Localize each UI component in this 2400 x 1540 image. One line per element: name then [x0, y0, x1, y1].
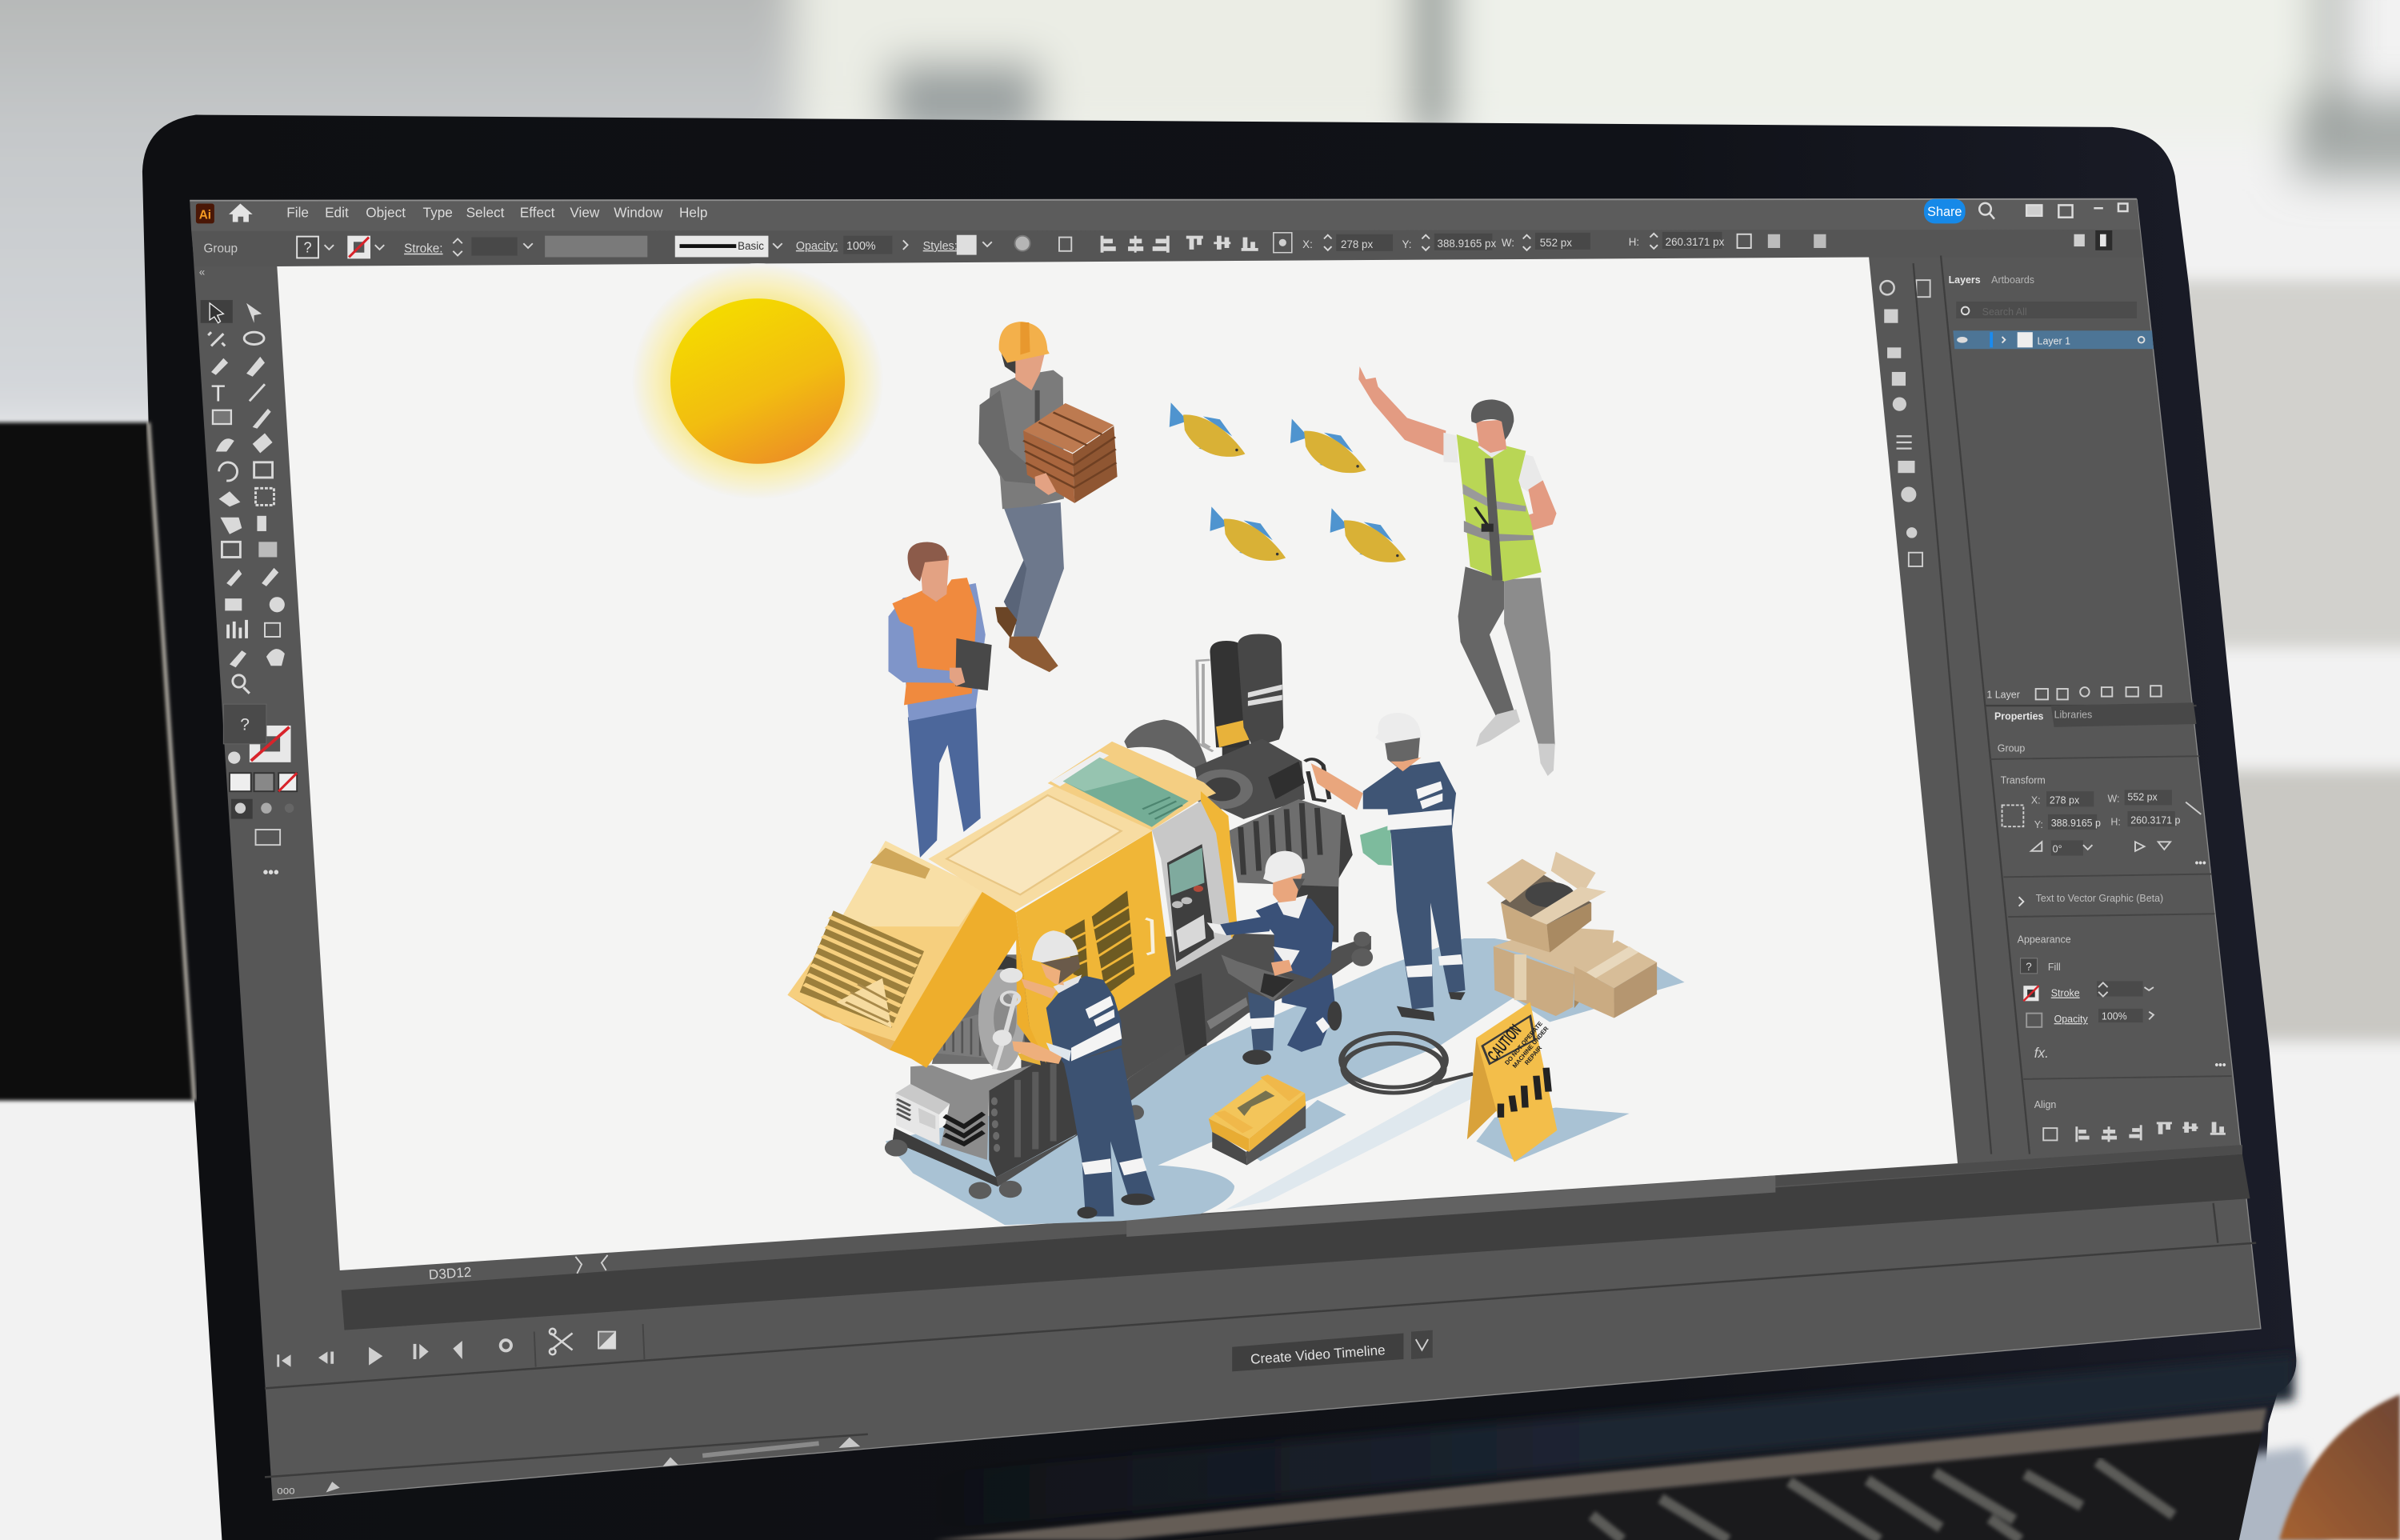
machine top rear strip [1048, 742, 1216, 830]
align icons [1059, 236, 1258, 253]
mesh grilles [1065, 890, 1134, 995]
caution sign lettering [1484, 1020, 1550, 1070]
share button: Share [1927, 205, 1962, 219]
menu items: Help [679, 205, 707, 221]
icon: sun [632, 263, 883, 499]
fish school [1170, 402, 1406, 562]
drawing mode icons [231, 799, 294, 845]
chevron vents [944, 1114, 984, 1144]
align section: Align [2034, 1099, 2056, 1110]
search field [1956, 302, 2137, 318]
menu bar [190, 199, 2140, 231]
panel tabs: Layers [1949, 274, 1981, 286]
appearance section: Fill [2048, 962, 2061, 973]
appearance section: 100% [2102, 1010, 2127, 1022]
machine upper section [787, 634, 1657, 1162]
laptop base and keyboard [918, 1354, 2334, 1540]
elbow duct [1124, 719, 1210, 778]
transform section: Y: [2034, 819, 2043, 830]
colour mode buttons [230, 773, 297, 791]
transform fields: 278 px [1341, 238, 1373, 250]
transform section: 0° [2053, 844, 2062, 855]
fish 4 [1330, 508, 1406, 562]
caution sign lettering: MACHINE UNDER [1511, 1025, 1550, 1070]
lower left box [1494, 926, 1614, 1016]
floor shadows [886, 938, 1685, 1225]
open top box [1486, 852, 1606, 952]
cylinder pair [1210, 634, 1283, 767]
menu items: File [286, 205, 309, 221]
caution sign lettering: DO NOT OPERATE [1503, 1020, 1544, 1066]
worker carrying crate [978, 322, 1118, 672]
appearance section: fx. [2034, 1045, 2049, 1061]
appearance section: ? [2026, 961, 2032, 973]
front technician with wrench [993, 930, 1155, 1218]
transform section: ••• [2195, 857, 2206, 869]
artboard label: D3D12 [428, 1264, 472, 1282]
reference point grid [1274, 233, 1292, 253]
bottom status bars [265, 1145, 2256, 1477]
caution sign lettering: REPAIR [1523, 1044, 1543, 1066]
control panel [1167, 844, 1214, 962]
transform section: 278 px [2050, 794, 2080, 806]
base rail and feet [885, 932, 1373, 1199]
transform fields: Y: [1402, 238, 1411, 250]
menu items [286, 205, 707, 221]
transform fields: 388.9165 px [1438, 238, 1496, 250]
timeline transport controls [277, 1329, 615, 1367]
fill and stroke swatches [223, 704, 291, 764]
transform section: Transform [2001, 775, 2046, 786]
fish 1 [1170, 402, 1245, 457]
properties tabs [1994, 709, 2092, 722]
text to vector row: Text to Vector Graphic (Beta) [2036, 893, 2163, 904]
timeline footer controls [277, 1438, 860, 1496]
transform section: 388.9165 p [2051, 818, 2101, 829]
drum mechanism [932, 954, 1025, 1070]
icon: app logo [196, 203, 214, 223]
properties panel: Group [1998, 742, 2025, 754]
icon: app logo: Ai [199, 209, 211, 222]
machine lower section [885, 932, 1373, 1199]
cable bundle [1305, 759, 1330, 801]
tool icons: T [211, 381, 226, 406]
left tools panel [199, 266, 297, 881]
open hatch cream face [787, 841, 983, 1050]
electrical unit [895, 1084, 950, 1146]
transform fields: X: [1302, 238, 1313, 250]
transform section: H: [2110, 816, 2121, 827]
panel footer [1986, 686, 2162, 700]
menu items: Select [466, 205, 505, 221]
bezel light rim [149, 422, 194, 1101]
transform section: W: [2108, 794, 2120, 805]
artboard canvas [277, 257, 1958, 1270]
transform fields [1302, 230, 2112, 251]
layers panel [1949, 274, 2162, 700]
timeline footer controls: ooo [277, 1484, 295, 1496]
right icon column [1880, 280, 1930, 566]
menu items: Edit [325, 205, 349, 221]
layer row [1953, 330, 2154, 349]
hand at lower right [2279, 1394, 2400, 1540]
pipes [1197, 660, 1213, 751]
caution sign lettering: CAUTION [1484, 1022, 1525, 1065]
grey control column [1152, 801, 1233, 970]
options bar: Styles: [923, 240, 958, 253]
tool icons [201, 300, 285, 694]
options bar: Stroke: [404, 242, 443, 256]
options bar: 100% [846, 240, 876, 253]
appearance section [2018, 934, 2226, 1070]
icon: home [229, 203, 253, 222]
pedestal [910, 1048, 1078, 1178]
yellow right side [1201, 791, 1238, 938]
brush preview [675, 236, 768, 257]
panel dividers [1914, 256, 2197, 1154]
toolbox [1209, 1074, 1346, 1166]
hatch vents [800, 910, 924, 1028]
options bar: Opacity: [796, 240, 838, 253]
kneeling technician [1207, 851, 1342, 1065]
menu items: Object [366, 205, 406, 221]
green window [1063, 758, 1189, 827]
search field: Search All [1982, 306, 2027, 318]
properties tabs: Libraries [2054, 709, 2092, 720]
appearance section: Opacity [2054, 1014, 2089, 1025]
cardboard boxes [1486, 852, 1657, 1018]
hatch yellow side [890, 890, 1017, 1068]
worker with tablet [889, 542, 992, 858]
transform fields: 552 px [1540, 237, 1572, 249]
menu items: Window [614, 205, 663, 221]
kneeling technician legs [1242, 974, 1342, 1065]
left tools panel: ••• [263, 864, 279, 881]
transform section: X: [2031, 794, 2041, 806]
lower right box [1574, 941, 1657, 1018]
panel tabs [1949, 274, 2034, 286]
options bar [191, 230, 2143, 266]
share button [1924, 199, 1966, 223]
motor housing [1194, 738, 1305, 819]
transform fields: W: [1502, 237, 1514, 249]
cooling fins [1228, 799, 1342, 886]
fish 3 [1210, 506, 1286, 561]
icon: split clip [598, 1332, 615, 1349]
window icons [1979, 203, 2127, 219]
rear standing technician [1311, 713, 1466, 1021]
menu items: Type [423, 205, 453, 221]
stroke swatch [347, 236, 370, 258]
appearance section: Stroke [2051, 988, 2080, 999]
fill swatch: ? [304, 240, 312, 256]
panel tabs: Artboards [1991, 274, 2034, 286]
layer row: Layer 1 [2038, 336, 2070, 347]
appearance section: ••• [2214, 1058, 2226, 1070]
appearance section: Appearance [2018, 934, 2071, 946]
lower chassis [1021, 934, 1307, 1134]
transform fields: H: [1629, 236, 1639, 248]
properties tabs: Properties [1994, 710, 2044, 722]
caution sign body [1467, 1002, 1557, 1162]
kneeling technician torso and head [1207, 851, 1334, 979]
coiled cable [1342, 1033, 1474, 1093]
align section [2034, 1099, 2226, 1142]
properties panel [1990, 702, 2232, 1142]
fish 2 [1290, 419, 1366, 473]
transform fields: 260.3171 px [1666, 236, 1725, 248]
transform section: 552 px [2127, 792, 2158, 803]
worker in green vest [1358, 366, 1557, 776]
left tools panel: « [199, 266, 205, 278]
fill swatch [297, 237, 318, 258]
yellow front face [1016, 831, 1170, 1062]
transform section [2001, 775, 2206, 869]
icon: globe [1014, 236, 1030, 251]
menu items: View [570, 205, 600, 221]
rear support [1286, 799, 1353, 942]
kneeling technician laptop [1221, 946, 1300, 1002]
menu items: Effect [520, 205, 555, 221]
transform section: 260.3171 p [2130, 814, 2181, 826]
create video timeline button [1232, 1330, 1433, 1371]
machine top cream [928, 782, 1153, 911]
create video timeline button: Create Video Timeline [1250, 1342, 1386, 1367]
fill and stroke swatches: ? [240, 716, 250, 734]
icon: scissors [550, 1329, 573, 1354]
panel footer: 1 Layer [1986, 689, 2020, 700]
brush preview: Basic [738, 240, 764, 252]
options bar: Group [203, 242, 238, 256]
screen UI base [190, 199, 2261, 1500]
upper workers [889, 322, 1557, 858]
